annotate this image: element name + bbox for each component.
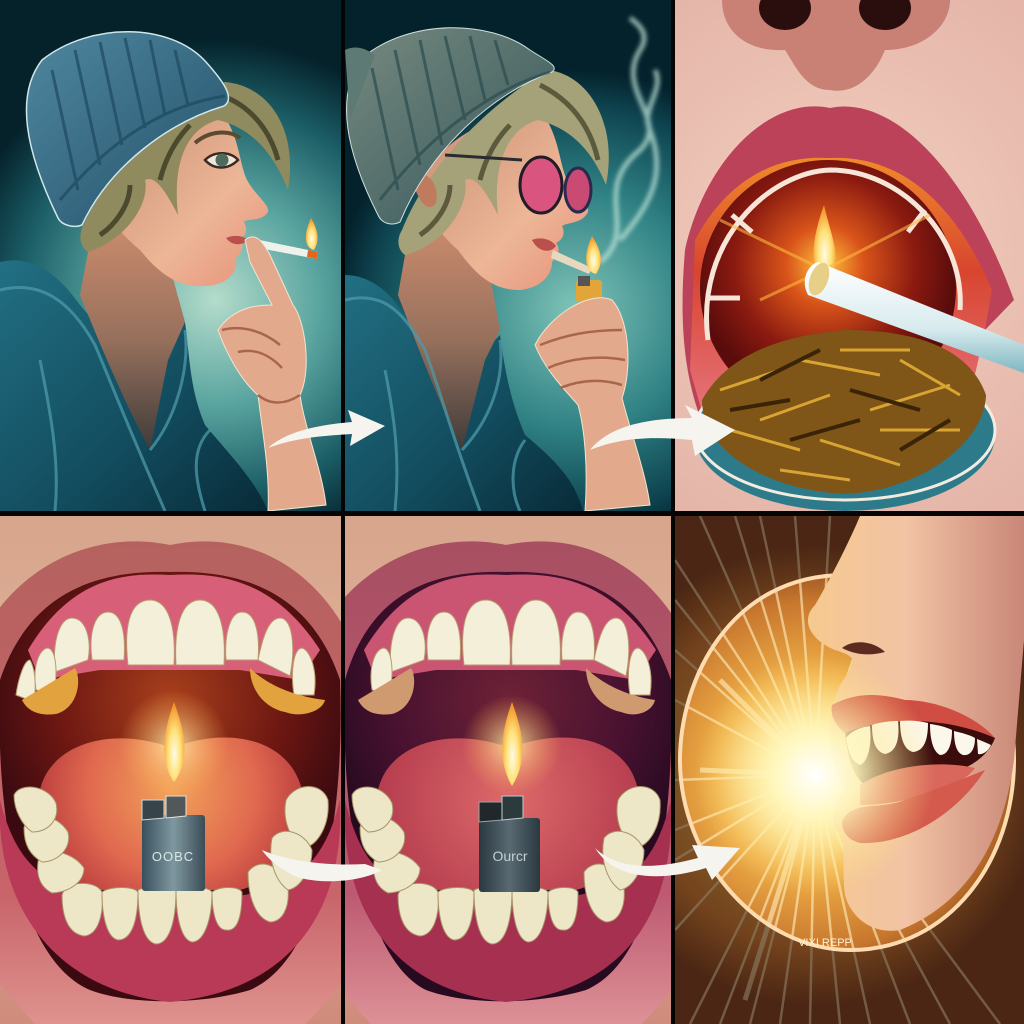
flame	[306, 218, 318, 250]
flame	[586, 236, 601, 274]
cigarette	[551, 250, 592, 274]
arrow: panel five to six	[595, 845, 740, 880]
panel: open mouth with lighter, warm	[0, 516, 360, 1024]
tobacco	[702, 330, 986, 494]
lighter	[576, 276, 602, 302]
flame glow	[462, 695, 562, 795]
upper gum	[28, 574, 320, 680]
mouth interior	[0, 572, 341, 1001]
beanie	[26, 32, 229, 226]
smoke	[600, 18, 657, 262]
nostril	[842, 642, 885, 654]
upper molars	[22, 668, 325, 714]
hair	[80, 82, 290, 252]
rays	[675, 516, 1000, 1024]
lighter	[479, 796, 540, 892]
flame	[814, 205, 836, 268]
ring caption: VIXI REPP	[798, 937, 852, 949]
mouth	[532, 238, 556, 251]
sunglasses	[445, 155, 591, 213]
lower gum	[345, 800, 671, 1002]
upper gum	[364, 574, 656, 680]
mouth	[226, 236, 248, 244]
face	[122, 120, 268, 286]
neck and chest	[398, 215, 500, 450]
tongue	[40, 737, 302, 890]
central glow	[695, 655, 935, 895]
lips	[0, 541, 360, 1024]
lighter label: Ourcr	[492, 848, 528, 864]
hand and wrist	[218, 237, 326, 511]
mouth opening	[845, 718, 995, 790]
lighter	[142, 796, 205, 891]
nose	[722, 0, 950, 91]
tongue and lower lip	[842, 764, 985, 843]
ear	[112, 178, 133, 209]
dark vignette	[675, 516, 1024, 1024]
arrow: panel two to three	[590, 405, 735, 456]
arrow: panel four to five	[262, 850, 382, 881]
hoodie	[345, 275, 583, 511]
hood folds and zipper	[345, 298, 525, 511]
panel: burst of light beside smiling face	[675, 516, 1024, 1024]
lower teeth	[14, 786, 328, 944]
tongue	[378, 737, 638, 890]
panel: teen holding a cigarette	[0, 0, 341, 511]
panel: teen lighting a cigarette	[345, 0, 671, 511]
dish	[699, 406, 994, 511]
lower teeth	[352, 786, 660, 944]
cigarette	[805, 262, 1024, 373]
lips	[683, 106, 1014, 440]
ear	[416, 175, 437, 208]
hand and wrist	[535, 298, 650, 511]
mouth interior	[700, 160, 956, 368]
mouth interior	[344, 572, 672, 1001]
face	[424, 117, 588, 290]
upper teeth	[371, 600, 651, 695]
arrow: panel one to two	[268, 410, 385, 448]
hoodie	[0, 260, 268, 511]
neck and chest	[80, 215, 185, 450]
upper teeth	[16, 600, 315, 702]
upper molars	[358, 668, 655, 714]
hair	[398, 70, 609, 255]
face	[808, 516, 1024, 931]
flame	[164, 702, 185, 782]
upper lip	[832, 695, 995, 738]
lighter label: OOBC	[152, 849, 194, 864]
hood folds and zipper	[0, 287, 210, 511]
lower gum	[0, 800, 340, 1002]
panel: tobacco inside the mouth	[675, 0, 1024, 511]
lips	[306, 541, 696, 1024]
ring	[707, 170, 960, 340]
smile teeth	[846, 721, 991, 765]
nostrils	[759, 0, 911, 30]
beanie	[346, 28, 554, 224]
flame glow	[119, 690, 229, 800]
panel: open mouth with lighter, cool	[306, 516, 696, 1024]
flame	[502, 702, 523, 786]
ring	[680, 575, 1014, 950]
iris	[216, 154, 228, 166]
eye	[205, 153, 238, 168]
cigarette	[260, 240, 318, 259]
eyebrow	[195, 133, 240, 143]
